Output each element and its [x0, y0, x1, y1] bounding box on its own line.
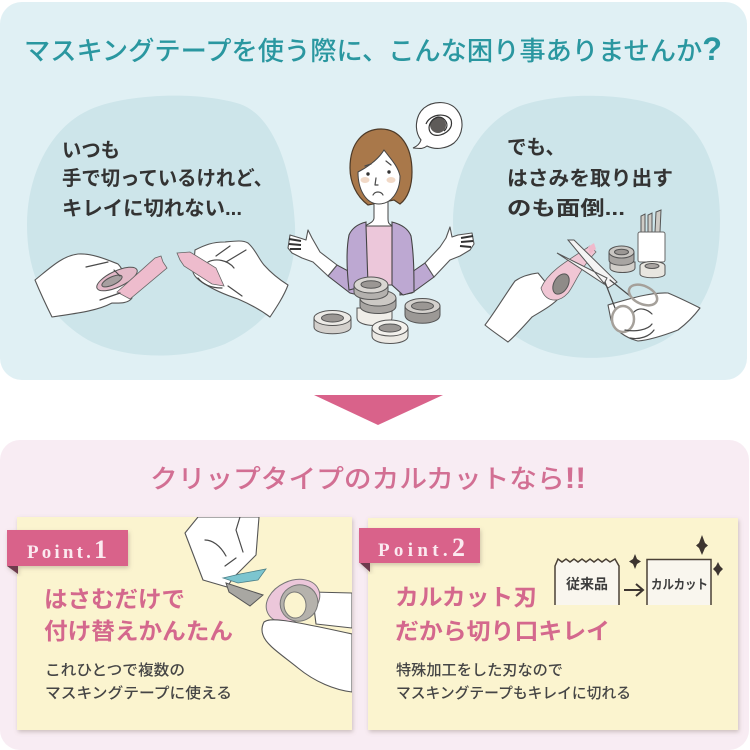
arrow: to karukatto [624, 584, 643, 596]
title: マスキングテープを使う際に、こんな困り事ありませんか? [24, 31, 722, 67]
heading: point 1 [44, 586, 233, 644]
illustration: hand holding tape [485, 243, 596, 342]
box: conventional [555, 559, 619, 605]
heading: point 2 [395, 584, 610, 644]
cardigan [347, 222, 414, 295]
heading: point 1: はさむだけで [44, 586, 185, 612]
neck [365, 198, 393, 226]
hair [350, 129, 412, 205]
text: right problem: でも、 [507, 137, 565, 159]
bubble: right problem [453, 96, 720, 358]
text: right problem [507, 137, 673, 220]
tape rolls pile [314, 277, 440, 344]
left hand [288, 230, 337, 276]
speech bubble with scribble [413, 103, 462, 148]
tape roll: front [372, 320, 408, 344]
tape roll: stack top [354, 277, 388, 300]
illustration: worried woman [288, 103, 474, 344]
tape roll: stack lower [357, 308, 392, 326]
diagram: conventional vs karukatto cut [555, 535, 723, 605]
arrow: down [314, 395, 443, 425]
heading: point 1: 付け替えかんたん [44, 618, 233, 644]
icon: sparkles [629, 535, 723, 576]
face details [360, 161, 396, 195]
left arm sleeve [328, 262, 360, 295]
illustration: hand with scissors [557, 240, 700, 341]
badge: point 2 [359, 528, 480, 572]
box: conventional: 従来品 [566, 576, 608, 592]
panel: problems [0, 2, 747, 380]
body: point 2 [396, 662, 631, 702]
body: point 2: 特殊加工をした刃なので [396, 662, 563, 679]
text: left problem: 手で切っているけれど、 [62, 167, 273, 190]
text: left problem: キレイに切れない... [62, 197, 242, 220]
right arm sleeve [400, 262, 434, 295]
body: point 1: これひとつで複数の [45, 662, 185, 679]
heading: point 2: カルカット刃 [395, 584, 537, 610]
illustration: clip and tape in hands [185, 517, 352, 692]
body: point 1 [45, 662, 232, 702]
panel: solution [0, 440, 749, 750]
card: point 1 [7, 517, 352, 730]
illustration: pen cup [638, 210, 665, 278]
body: point 1: マスキングテープに使える [45, 685, 232, 702]
heading: solution: クリップタイプのカルカットなら !! [150, 462, 586, 495]
badge: point 1: Point.1 [27, 535, 107, 564]
pink top [365, 226, 393, 285]
illustration: hands tearing tape [35, 241, 288, 317]
tape roll: right [405, 298, 440, 323]
illustration: tape stack [609, 246, 635, 272]
right hand [425, 227, 474, 277]
heading: point 2: だから切り口キレイ [395, 618, 610, 644]
body: point 2: マスキングテープもキレイに切れる [396, 685, 631, 702]
box: karukatto [647, 560, 711, 605]
tape roll: stack middle [360, 290, 396, 314]
face [358, 150, 400, 204]
text: right problem: はさみを取り出す [507, 167, 673, 190]
text: left problem [62, 140, 273, 220]
badge: point 1 [7, 530, 128, 574]
text: right problem: のも面倒... [507, 197, 625, 220]
card: point 2 [359, 518, 738, 730]
box: karukatto: カルカット [651, 577, 708, 592]
bubble: left problem [27, 96, 295, 356]
text: left problem: いつも [62, 140, 120, 162]
tape roll: left [314, 310, 351, 334]
badge: point 2: Point.2 [378, 533, 465, 562]
